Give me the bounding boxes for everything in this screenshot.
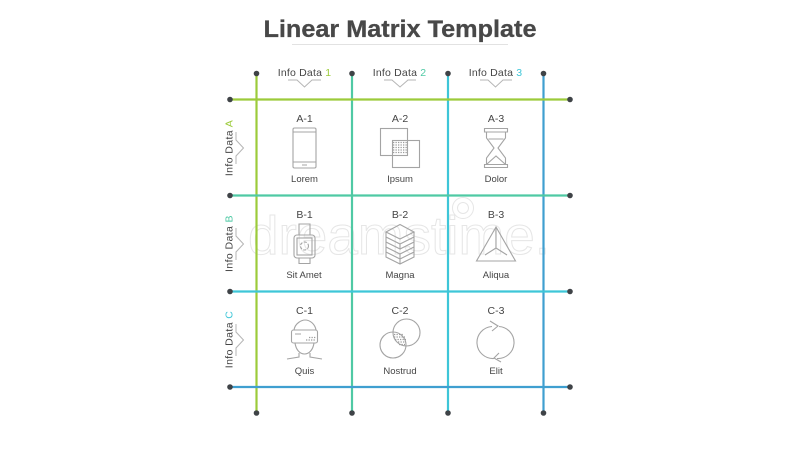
matrix grid lines xyxy=(230,73,570,413)
cell B-2 xyxy=(385,209,415,281)
cell C-1 xyxy=(287,305,322,377)
icon: smartphone xyxy=(293,128,316,168)
column header 3: Info Data 3 xyxy=(469,67,522,79)
cell A-3: A-3 xyxy=(488,113,504,125)
title: Linear Matrix Template xyxy=(264,16,536,43)
cell C-2: Nostrud xyxy=(383,366,417,377)
cell B-1: B-1 xyxy=(296,209,313,221)
cell C-3: Elit xyxy=(489,366,503,377)
cell C-2 xyxy=(380,305,420,377)
icon: triangle prism xyxy=(476,227,516,261)
cell B-1: Sit Amet xyxy=(286,270,322,281)
cell C-2: C-2 xyxy=(392,305,409,317)
row header B xyxy=(224,215,244,272)
cell B-2: Magna xyxy=(385,270,415,281)
cell C-1: C-1 xyxy=(296,305,313,317)
column header 2 xyxy=(373,67,426,87)
icon: overlapping circles xyxy=(380,319,420,358)
cell A-1: Lorem xyxy=(291,174,318,185)
cell A-2 xyxy=(380,113,420,185)
grid end dots xyxy=(227,71,573,416)
cell A-1: A-1 xyxy=(296,113,313,125)
cell A-3: Dolor xyxy=(485,174,507,185)
row header B: Info Data B xyxy=(224,215,236,272)
cell B-2: B-2 xyxy=(392,209,408,221)
icon: circular arrows xyxy=(477,321,514,362)
cell C-1: Quis xyxy=(295,366,315,377)
cell B-3 xyxy=(476,209,516,281)
cell B-3: Aliqua xyxy=(483,270,510,281)
column header 1: Info Data 1 xyxy=(278,67,331,79)
icon: person with VR headset xyxy=(287,320,322,359)
icon: layered stack xyxy=(386,224,414,264)
row header C xyxy=(224,311,244,368)
cell A-2: A-2 xyxy=(392,113,408,125)
column header 1 xyxy=(278,67,331,87)
cell A-2: Ipsum xyxy=(387,174,413,185)
icon: overlapping squares xyxy=(380,128,420,168)
cell B-3: B-3 xyxy=(488,209,504,221)
row header C: Info Data C xyxy=(224,311,236,368)
cell A-1 xyxy=(291,113,318,185)
icon: hourglass xyxy=(484,128,508,168)
watermark: dreamstime. xyxy=(248,206,550,266)
row header A xyxy=(224,120,244,176)
cell A-3 xyxy=(484,113,508,185)
cell B-1 xyxy=(286,209,322,281)
column header 2: Info Data 2 xyxy=(373,67,426,79)
column header 3 xyxy=(469,67,522,87)
row header A: Info Data A xyxy=(224,120,236,176)
icon: smartwatch xyxy=(294,224,315,264)
cell C-3 xyxy=(477,305,514,377)
cell C-3: C-3 xyxy=(488,305,505,317)
